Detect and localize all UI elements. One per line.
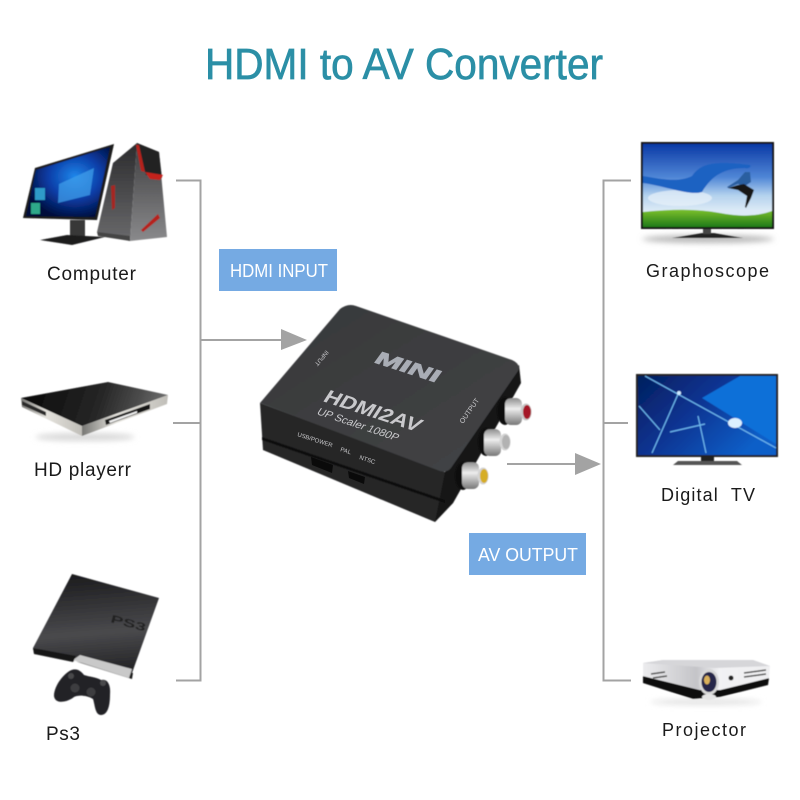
device: projector [643,660,770,705]
arrow: into converter [281,329,307,350]
left bracket connector [173,180,284,680]
printed text on converter: UP Scaler 1080P [314,406,402,444]
label: Computer: Computer [47,264,137,285]
label: Graphoscope: Graphoscope [646,261,769,281]
printed text on converter: NTSC [358,455,376,466]
label: HDMI INPUT [219,249,337,291]
device: computer [23,143,167,245]
RCA jacks [455,397,532,490]
icon: game controller [54,669,110,715]
right bracket connector [604,180,631,680]
label: HD playerr: HD playerr [34,460,132,481]
device: graphoscope TV [641,142,774,243]
converter body [260,305,521,522]
label: Digital TV: Digital TV [661,485,755,505]
device: HD player [21,382,168,441]
arrow: out of converter [507,453,601,475]
title: HDMI to AV Converter [205,40,603,89]
icon: monitor [23,144,114,245]
device: digital TV [636,374,778,465]
printed text on converter: PAL [339,447,352,456]
icon: console [33,574,159,679]
printed text on converter: USB/POWER [296,432,334,449]
label: Ps3: Ps3 [46,724,80,745]
device: HDMI2AV converter box [260,305,532,522]
printed text on converter: INPUT [313,349,329,367]
printed text on converter [296,348,482,466]
device: Ps3 console and controller [33,574,159,715]
USB port and switch [311,457,365,484]
printed text on converter: HDMI2AV [319,387,426,436]
label: AV OUTPUT: AV OUTPUT [478,544,578,565]
printed text on converter: MINI [371,348,446,386]
icon: console: PS3 [109,613,147,634]
printed text on converter: OUTPUT [459,397,482,425]
label: AV OUTPUT [469,533,586,575]
label: Projector: Projector [662,720,746,740]
icon: PC tower [97,143,167,241]
label: HDMI INPUT: HDMI INPUT [230,260,328,281]
